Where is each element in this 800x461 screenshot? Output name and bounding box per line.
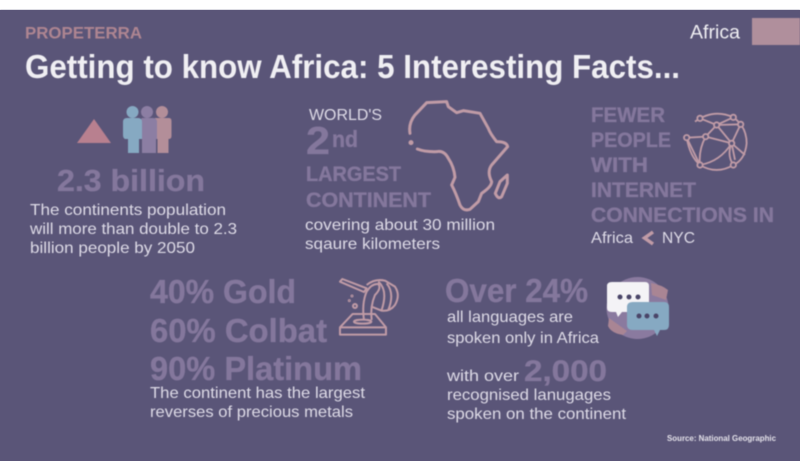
source note: Source: National Geographic [667,433,776,443]
stats: metal shares: 60% Colbat [150,312,327,349]
languages description: spoken only in Africa [447,330,599,347]
metals description: reverses of precious metals [150,404,353,421]
stat: 2nd largest continent: CONTINENT [306,189,431,212]
region tag [690,18,800,45]
heading: fewer people: WITH [591,154,648,177]
panel: continent size [305,102,508,253]
panel: population [29,106,237,257]
stat: 2.3 billion: 2.3 billion [57,163,205,198]
title: Getting to know Africa: 5 Interesting Facts... [25,48,680,85]
population description: will more than double to 2.3 [29,221,237,238]
panel: languages [445,272,669,423]
recognised languages description [447,387,627,423]
languages description: all languages are [447,309,573,326]
metals description: The continent has the largest [150,385,366,402]
heading: fewer people: INTERNET [591,179,696,202]
stat: with over 2,000: 2,000 [524,355,607,388]
stats: metal shares [150,273,362,387]
population description: The continents population [30,202,226,219]
continent description: sqaure kilometers [305,236,440,253]
icon: africa outline [410,102,508,210]
stat: 2nd largest continent: 2 [306,120,330,163]
comparison: africa less than nyc: Africa [591,230,633,247]
continent description [305,217,495,253]
panel: internet connections [591,104,774,247]
metals description [150,385,366,421]
icon: network globe [684,114,747,170]
comparison: africa less than nyc [591,230,695,247]
stats: metal shares: 90% Platinum [150,350,362,387]
icon: speech bubbles [606,277,669,339]
continent description: covering about 30 million [305,217,495,234]
brand logo: PROPETERRA [25,24,142,42]
world's label: WORLD'S [309,107,382,124]
heading: fewer people: PEOPLE [591,129,671,152]
heading: fewer people [591,104,774,227]
recognised languages description: recognised lanugages [447,387,611,404]
stat: with over 2,000: with over [446,368,520,385]
stat: 2nd largest continent: nd [332,126,358,152]
comparison: africa less than nyc: NYC [662,230,695,247]
recognised languages description: spoken on the continent [447,406,627,423]
region tag: Africa [690,22,740,44]
heading: fewer people: CONNECTIONS IN [591,204,774,227]
heading: fewer people: FEWER [591,104,665,127]
panel: precious metals [150,273,398,421]
icon: three people [123,106,172,153]
stats: metal shares: 40% Gold [150,273,296,310]
population description: billion people by 2050 [30,240,195,257]
stat: 2nd largest continent [306,120,431,212]
stat: 2nd largest continent: LARGEST [306,163,401,186]
languages description [447,309,599,347]
population description [29,202,237,257]
icon: pouring crucible [340,279,398,335]
stat: over 24%: Over 24% [445,272,588,309]
icon: up triangle [77,119,111,143]
stat: with over 2,000 [446,355,607,388]
